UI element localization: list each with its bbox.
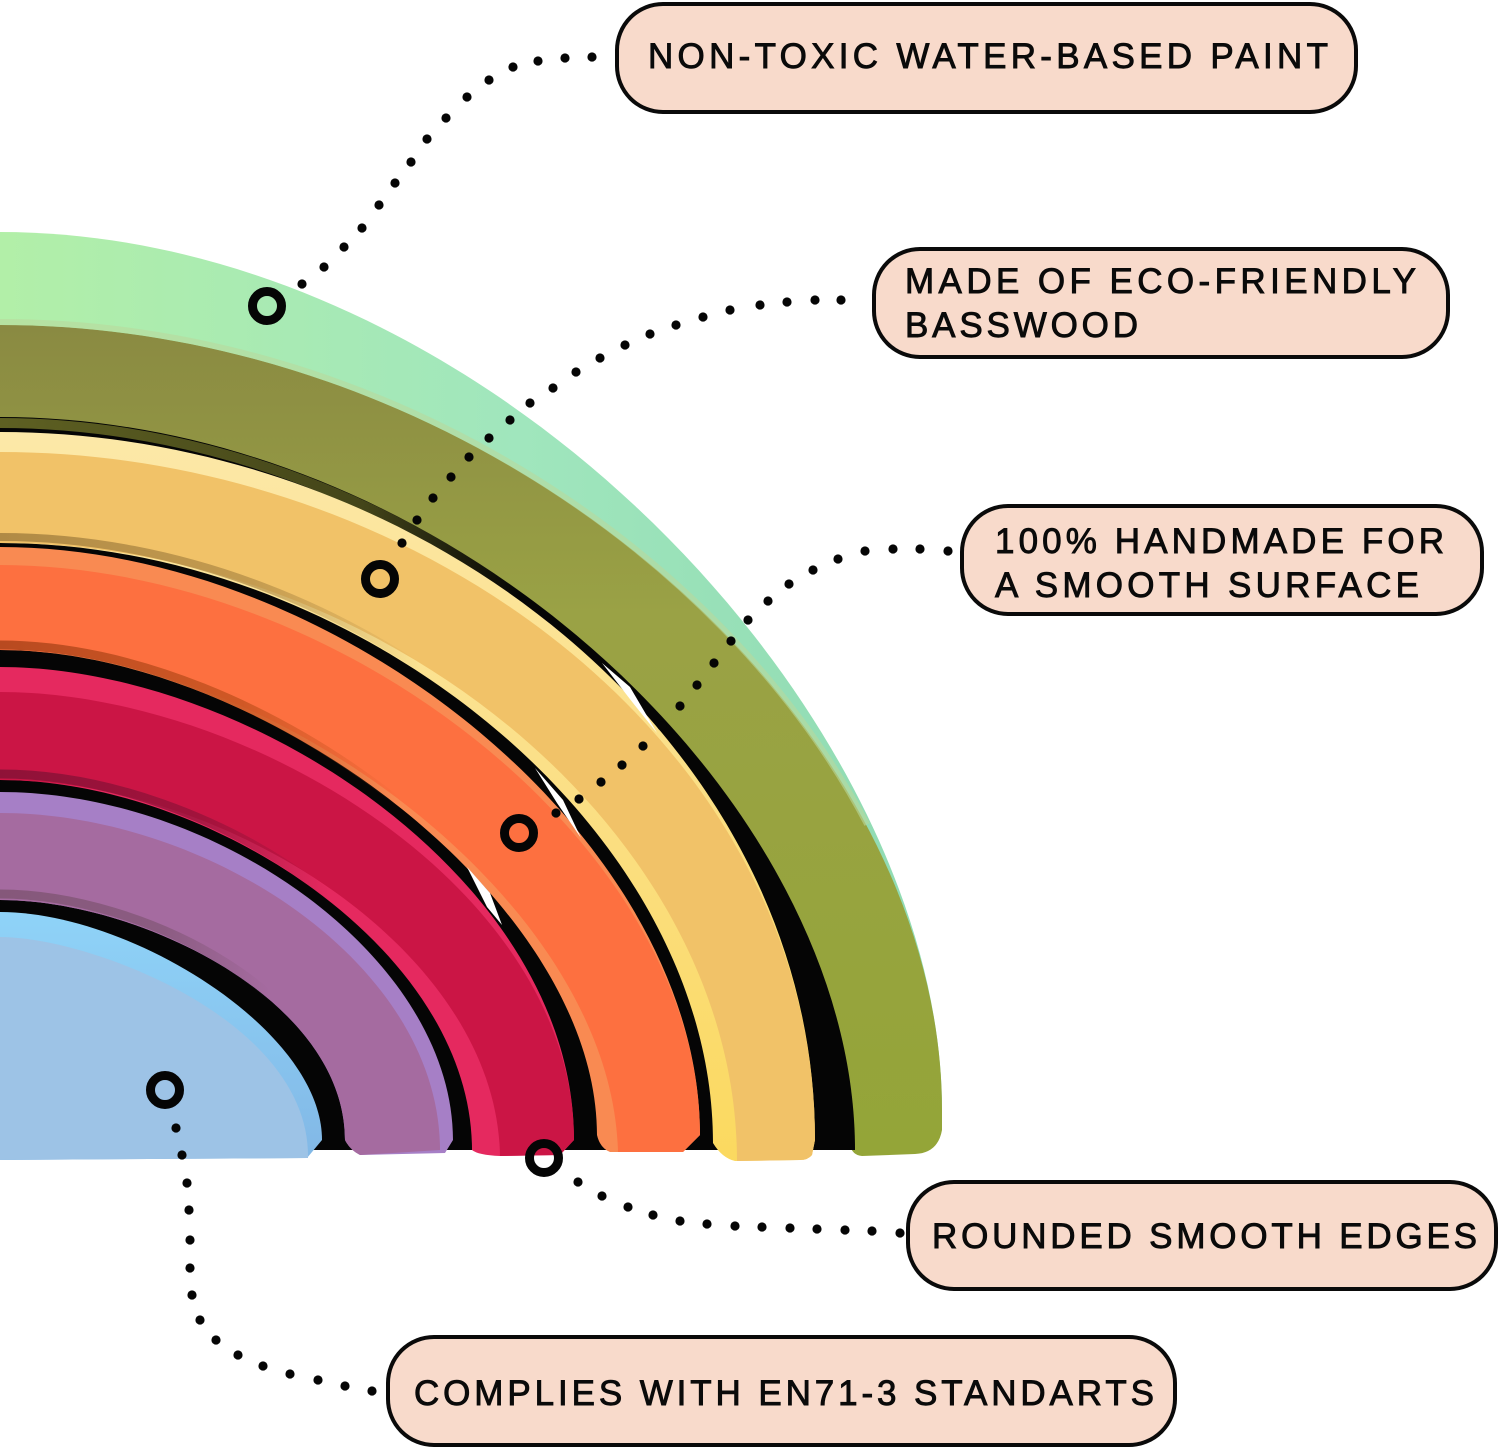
label text: NON-TOXIC WATER-BASED PAINT [648, 37, 1328, 76]
dotted leader [171, 1123, 377, 1396]
callout: basswood [366, 249, 1448, 594]
white slivers between arches [467, 663, 657, 925]
arch: olive [0, 322, 942, 1156]
ring marker [150, 1076, 180, 1104]
dotted leader [551, 544, 953, 818]
pill label [617, 4, 1356, 112]
label text [995, 522, 1444, 605]
arch: blue [0, 912, 322, 1160]
label text: ROUNDED SMOOTH EDGES [932, 1217, 1477, 1256]
label text [905, 262, 1416, 345]
pill label [962, 506, 1482, 614]
callout: non-toxic paint [252, 4, 1356, 320]
dotted leader [297, 52, 597, 289]
callout: EN71-3 [150, 1076, 1175, 1445]
arch: orange [0, 547, 700, 1152]
arch: purple [0, 792, 453, 1155]
ring marker [530, 1144, 558, 1172]
rainbow stacking toy [0, 232, 942, 1161]
label text: MADE OF ECO-FRIENDLY [905, 262, 1416, 301]
arch: crimson [0, 667, 574, 1156]
callout: rounded edges [530, 1144, 1496, 1289]
pill label [908, 1182, 1496, 1289]
shadow gaps between arches [0, 417, 855, 1150]
callout: handmade [504, 506, 1482, 848]
pill label [388, 1337, 1175, 1445]
ring marker [504, 818, 534, 848]
pill label [874, 249, 1448, 357]
label text: 100% HANDMADE FOR [995, 522, 1444, 561]
label text: COMPLIES WITH EN71-3 STANDARTS [414, 1374, 1154, 1413]
dotted leader [573, 1177, 905, 1238]
ring marker [366, 564, 394, 594]
label text: BASSWOOD [905, 306, 1138, 345]
dotted leader [397, 295, 846, 548]
arch: yellow [0, 432, 815, 1161]
ring marker [252, 292, 282, 320]
arch: mint back face [0, 232, 942, 1110]
label text: A SMOOTH SURFACE [995, 566, 1419, 605]
olive inner shadow [0, 423, 855, 1150]
